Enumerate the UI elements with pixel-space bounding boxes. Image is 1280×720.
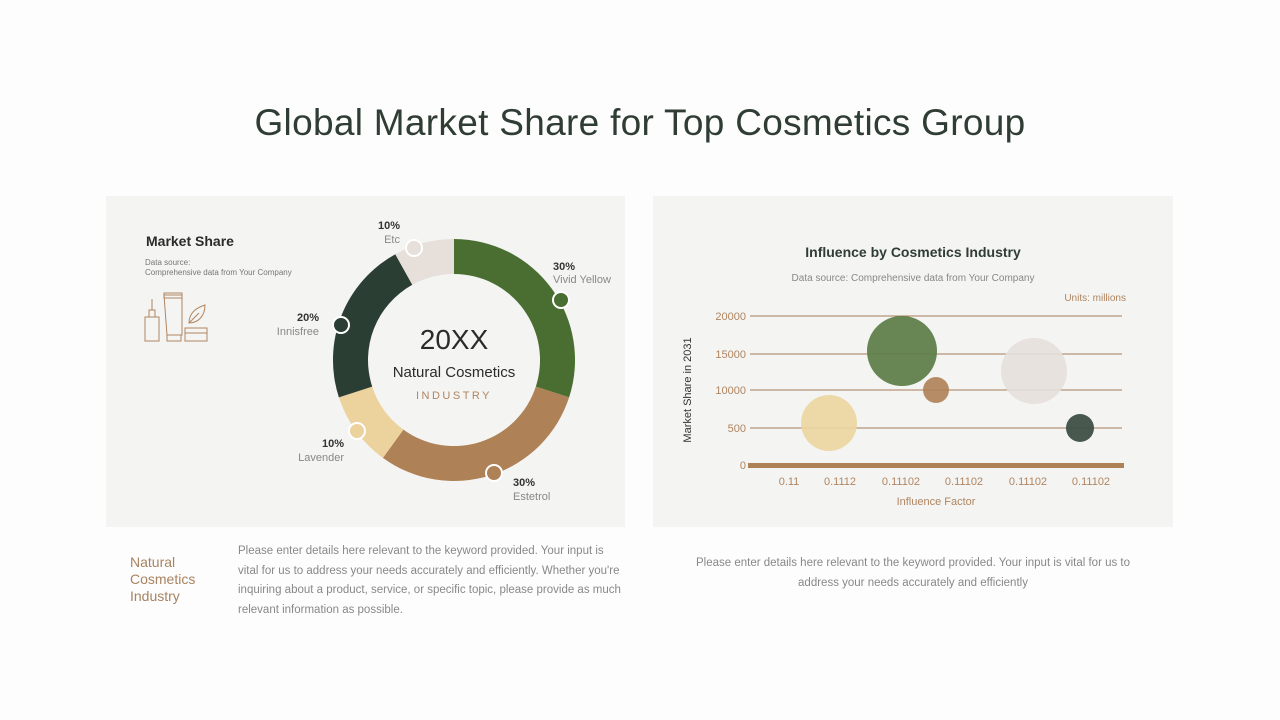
data source: Data source:: [145, 258, 190, 267]
labels: Vivid Yellow: [553, 274, 611, 286]
labels: 30%: [553, 261, 575, 273]
center text: Natural Cosmetics: [393, 364, 515, 381]
labels: 30%: [513, 477, 535, 489]
x axis labels: 0.11102: [945, 476, 983, 488]
x axis labels: 0.1112: [824, 476, 856, 488]
data source: [145, 258, 292, 277]
center text: [393, 324, 515, 402]
heading: market share: Market Share: [146, 233, 234, 249]
y axis labels: 0: [740, 460, 746, 472]
labels: 10%: [322, 438, 344, 450]
labels: 20%: [297, 312, 319, 324]
center text: INDUSTRY: [416, 390, 492, 402]
labels: 10%: [378, 220, 400, 232]
text block right: Please enter details here relevant to the keyword provided. Your input is vital for us to address your needs accurately and efficiently: [696, 557, 1130, 588]
title: Global Market Share for Top Cosmetics Group: [254, 102, 1026, 143]
side heading: Cosmetics: [130, 571, 195, 587]
bubble chart: [682, 244, 1126, 508]
y axis labels: 10000: [715, 385, 746, 397]
chart title: Influence by Cosmetics Industry: [805, 244, 1021, 260]
x axis labels: [779, 476, 1110, 488]
x axis labels: 0.11102: [1072, 476, 1110, 488]
panel: bubble chart: [653, 196, 1173, 527]
y axis labels: 500: [728, 423, 746, 435]
gridlines: [750, 316, 1122, 428]
segment: innisfree: [333, 254, 412, 397]
x axis title: Influence Factor: [897, 496, 976, 508]
units: Units: millions: [1064, 293, 1126, 304]
data source: Comprehensive data from Your Company: [145, 268, 292, 277]
x axis labels: 0.11102: [882, 476, 920, 488]
text block left: Please enter details here relevant to the keyword provided. Your input is vital for us to address your needs accurately and efficiently. Whether you're inquiring about a product, service, or specific topic, please provide as much relevant information as possible.: [238, 545, 621, 616]
y axis labels: 20000: [715, 311, 746, 323]
segment: etc: [395, 239, 454, 285]
x axis labels: 0.11: [779, 476, 799, 488]
donut chart: [277, 220, 611, 503]
labels: Lavender: [298, 452, 344, 464]
y axis labels: 15000: [715, 349, 746, 361]
center text: 20XX: [420, 324, 489, 355]
labels: [277, 220, 611, 503]
panel: market share: [106, 196, 625, 527]
side heading: Industry: [130, 588, 180, 604]
side heading: [130, 554, 195, 604]
segment: lavender: [339, 387, 403, 458]
x axis labels: 0.11102: [1009, 476, 1047, 488]
bubbles: [801, 316, 1094, 451]
markers: [333, 240, 569, 481]
side heading: Natural: [130, 554, 175, 570]
icon: cosmetics: [144, 292, 208, 342]
labels: Innisfree: [277, 326, 319, 338]
segment: vivid yellow: [454, 239, 575, 397]
y axis title: Market Share in 2031: [682, 337, 694, 443]
y axis labels: [715, 311, 746, 472]
labels: Etc: [384, 234, 400, 246]
labels: Estetrol: [513, 491, 550, 503]
chart source: Data source: Comprehensive data from Your Company: [792, 273, 1034, 284]
segment: estetrol: [383, 387, 569, 481]
